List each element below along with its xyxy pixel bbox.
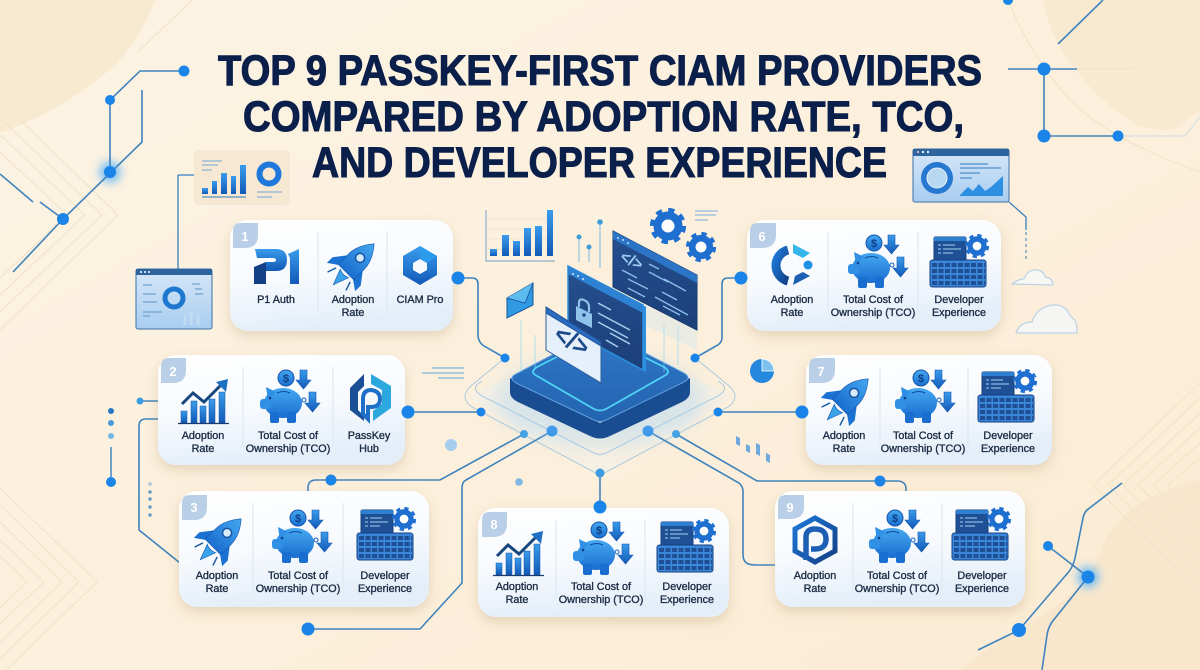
- label: Adoption Rate: Rate: [506, 594, 528, 606]
- icon: piggy bank: [573, 522, 633, 575]
- icon: piggy bank: [272, 510, 332, 563]
- window: code dark: [613, 231, 697, 330]
- label: Total Cost of Ownership: Ownership (TCO): [881, 443, 965, 455]
- label: Developer Experience: Experience: [955, 583, 1009, 595]
- label: Total Cost of Ownership: Ownership (TCO): [559, 594, 643, 606]
- icon: developer keyboard: [357, 508, 415, 560]
- badge 9: 9: [786, 500, 794, 515]
- label: Developer Experience: Experience: [660, 594, 714, 606]
- label: Adoption Rate: Adoption: [496, 581, 538, 593]
- dashboard: top left chart tile: [194, 150, 290, 205]
- circuit: left side: [106, 175, 1026, 563]
- label: Adoption Rate: Adoption: [823, 430, 865, 442]
- dashboard: top right window: [913, 149, 1009, 202]
- badge 7: 7: [817, 364, 825, 379]
- panel: provider 1: [230, 220, 453, 331]
- label: Adoption Rate: Adoption: [196, 570, 238, 582]
- title: AND DEVELOPER EXPERIENCE: [312, 140, 887, 187]
- window: light code: [546, 307, 601, 383]
- mini bar chart: [486, 210, 555, 261]
- label: Developer Experience: Developer: [934, 294, 984, 306]
- logo: PassKey Hub: [350, 374, 391, 421]
- label: Total Cost of Ownership: Ownership (TCO): [831, 307, 915, 319]
- label: Adoption Rate: Rate: [206, 583, 228, 595]
- antenna pins: [576, 219, 603, 268]
- icon: piggy bank: [869, 510, 929, 563]
- icon: growth chart: [493, 531, 544, 576]
- title: [218, 48, 982, 187]
- panel: provider 6: [747, 220, 1001, 331]
- label: Adoption Rate: Adoption: [794, 570, 836, 582]
- circuit: top right: [1003, 0, 1200, 142]
- title: COMPARED BY ADOPTION RATE, TCO,: [243, 94, 964, 141]
- hub platform: [495, 290, 705, 445]
- label: Total Cost of Ownership: Ownership (TCO): [246, 443, 330, 455]
- panel: provider 9: [775, 491, 1025, 607]
- connector end dots on card edges: [402, 272, 808, 514]
- gears: [652, 210, 718, 260]
- icon: piggy bank: [848, 235, 908, 288]
- label: Adoption Rate: [771, 294, 813, 319]
- title: TOP 9 PASSKEY-FIRST CIAM PROVIDERS: [218, 48, 982, 95]
- dashboard: left window: [136, 269, 212, 329]
- label: PassKey Hub: Hub: [359, 443, 379, 455]
- badge 2: 2: [169, 364, 177, 379]
- label: Adoption Rate: [823, 430, 865, 455]
- icon: rocket: [319, 230, 388, 299]
- label: Total Cost of Ownership: [256, 570, 340, 595]
- label: Adoption Rate: [332, 294, 374, 319]
- logo: P1: [254, 249, 299, 284]
- badge 6: 6: [758, 229, 766, 244]
- label: P1 Auth: P1 Auth: [257, 294, 295, 306]
- logo: provider 9: [795, 518, 835, 562]
- label: Total Cost of Ownership: Total Cost of: [893, 430, 954, 442]
- label: Developer Experience: Developer: [360, 570, 410, 582]
- label: Adoption Rate: Adoption: [332, 294, 374, 306]
- logo: CIAM Pro hexagon: [403, 246, 437, 285]
- label: Adoption Rate: [196, 570, 238, 595]
- badge 2: [161, 358, 186, 383]
- label: Adoption Rate: [182, 430, 224, 455]
- circuit: top left: [0, 66, 190, 272]
- label: Total Cost of Ownership: [855, 570, 939, 595]
- icon: developer keyboard: [657, 520, 715, 572]
- connectors to the central hub: [302, 278, 906, 636]
- logo: provider 6: [776, 244, 812, 285]
- icon: rocket: [813, 365, 882, 434]
- badge 6: [750, 223, 776, 248]
- label: Developer Experience: [660, 581, 714, 606]
- label: Developer Experience: Experience: [981, 443, 1035, 455]
- label: Adoption Rate: [794, 570, 836, 595]
- label: Developer Experience: Experience: [932, 307, 986, 319]
- label: Adoption Rate: Rate: [804, 583, 826, 595]
- label: Total Cost of Ownership: Ownership (TCO): [855, 583, 939, 595]
- badge 1: 1: [241, 229, 249, 244]
- label: PassKey Hub: [348, 430, 391, 455]
- icon: developer keyboard: [930, 235, 988, 287]
- central hub illustration: [486, 210, 718, 445]
- panel: provider 7: [806, 355, 1052, 465]
- label: Total Cost of Ownership: Ownership (TCO): [256, 583, 340, 595]
- label: Developer Experience: Developer: [957, 570, 1007, 582]
- icon: piggy bank: [895, 370, 955, 423]
- label: Total Cost of Ownership: Total Cost of: [843, 294, 904, 306]
- panel: provider 8: [478, 508, 729, 617]
- badge 3: [182, 495, 207, 520]
- window: light code: </>: [549, 320, 594, 362]
- label: Adoption Rate: Adoption: [182, 430, 224, 442]
- panel: provider 2: [158, 355, 405, 465]
- label: Developer Experience: Developer: [662, 581, 712, 593]
- label: Adoption Rate: Rate: [833, 443, 855, 455]
- window: lock: [568, 266, 646, 372]
- icon: clouds: [1012, 270, 1077, 333]
- icon: rocket: [186, 505, 255, 574]
- circuit: bottom right: [978, 483, 1122, 670]
- icon: envelope: [507, 283, 533, 318]
- label: Total Cost of Ownership: [559, 581, 643, 606]
- label: Adoption Rate: [496, 581, 538, 606]
- label: Adoption Rate: Rate: [781, 307, 803, 319]
- badge 1: [233, 223, 258, 248]
- badge 7: [809, 358, 835, 383]
- label: Total Cost of Ownership: Total Cost of: [268, 570, 329, 582]
- label: Developer Experience: Experience: [358, 583, 412, 595]
- badge 8: [482, 512, 507, 537]
- panel: provider 3: [179, 491, 429, 607]
- label: Total Cost of Ownership: Total Cost of: [867, 570, 928, 582]
- label: Developer Experience: [955, 570, 1009, 595]
- label: CIAM Pro: CIAM Pro: [397, 294, 443, 306]
- label: Adoption Rate: Adoption: [771, 294, 813, 306]
- icon: developer keyboard: [952, 508, 1010, 560]
- label: PassKey Hub: PassKey: [348, 430, 391, 442]
- label: Total Cost of Ownership: [246, 430, 330, 455]
- badge 8: 8: [490, 517, 498, 532]
- badge 3: 3: [190, 500, 198, 515]
- label: Total Cost of Ownership: Total Cost of: [258, 430, 319, 442]
- label: Total Cost of Ownership: [831, 294, 915, 319]
- window: code dark: </>: [617, 248, 646, 274]
- label: Total Cost of Ownership: Total Cost of: [571, 581, 632, 593]
- label: Developer Experience: Developer: [983, 430, 1033, 442]
- label: Developer Experience: [358, 570, 412, 595]
- icon: growth chart: [178, 379, 229, 424]
- icon: developer keyboard: [978, 370, 1036, 422]
- label: Developer Experience: [981, 430, 1035, 455]
- label: Developer Experience: [932, 294, 986, 319]
- decorative accents: [422, 359, 774, 486]
- label: Adoption Rate: Rate: [342, 307, 364, 319]
- label: Adoption Rate: Rate: [192, 443, 214, 455]
- label: Total Cost of Ownership: [881, 430, 965, 455]
- icon: piggy bank: [260, 370, 320, 423]
- badge 9: [778, 495, 804, 519]
